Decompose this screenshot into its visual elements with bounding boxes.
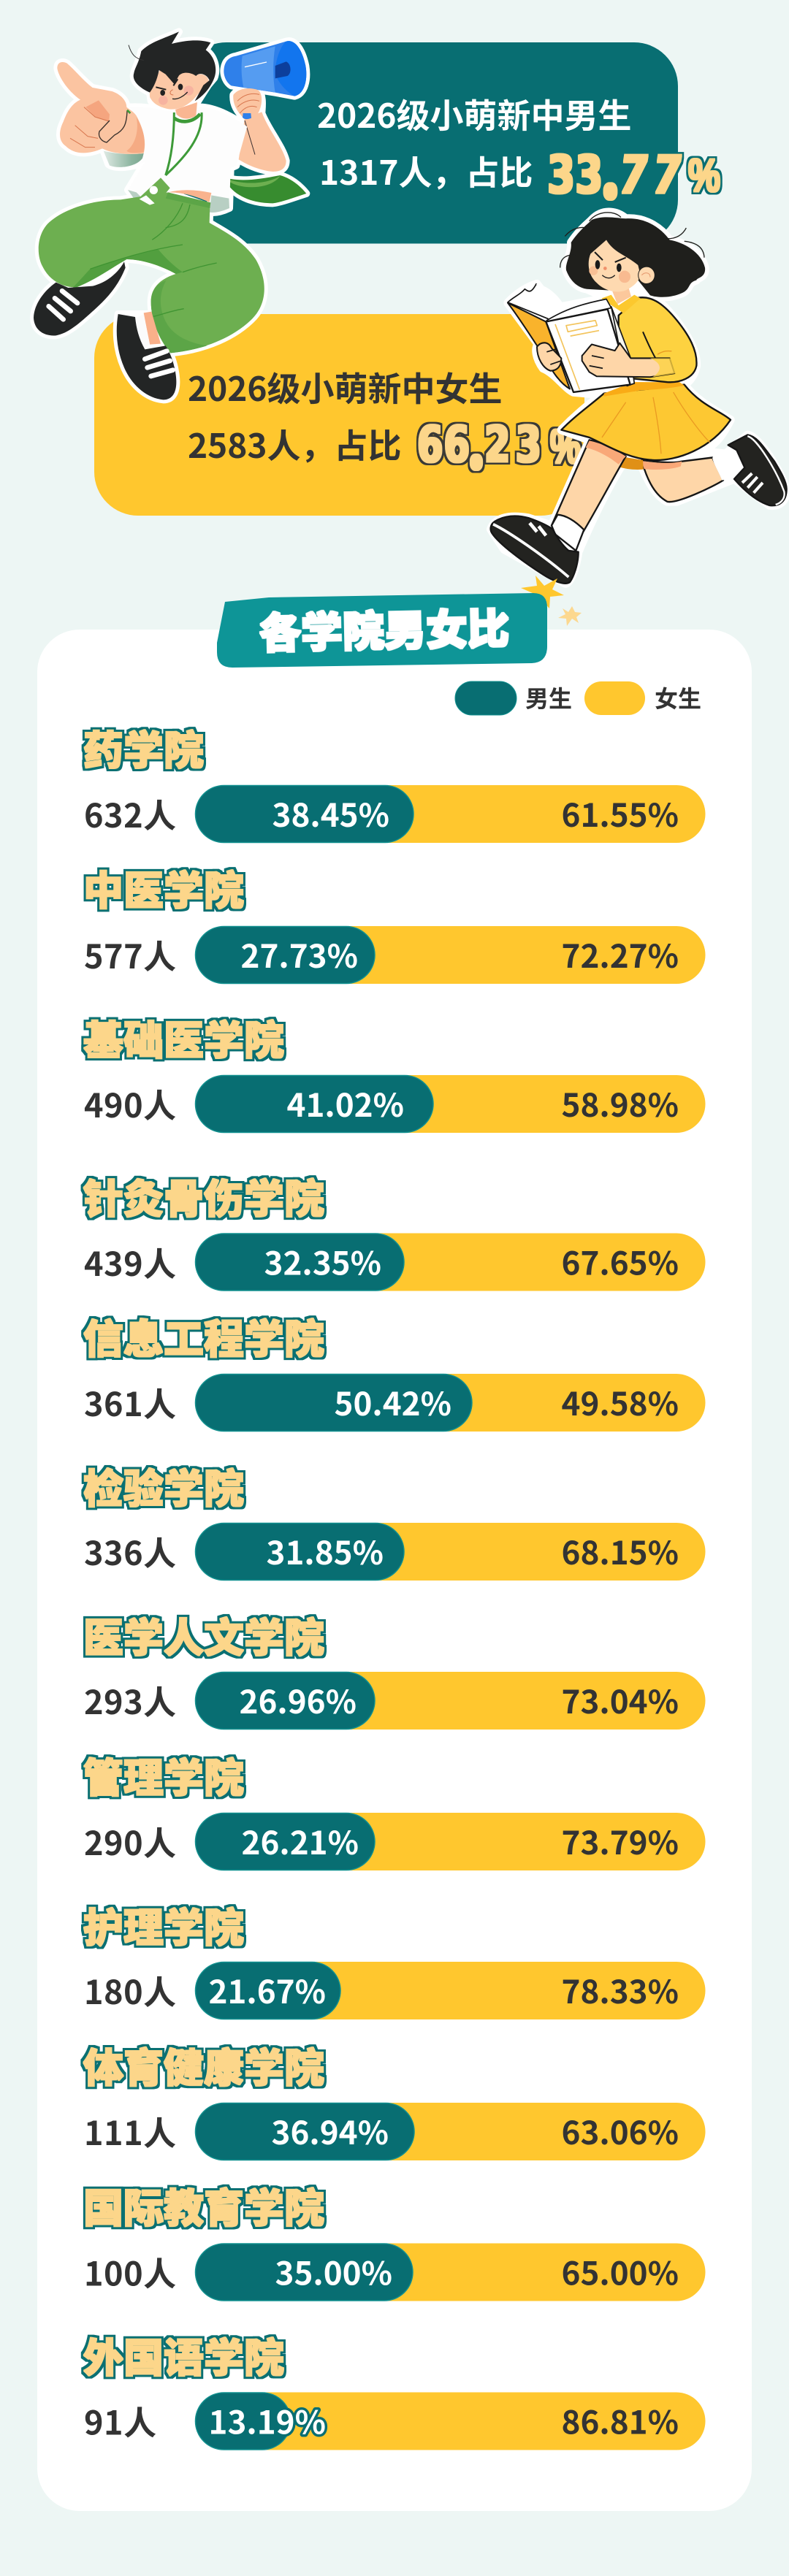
row: 中医学院	[83, 858, 706, 984]
boy: ribbon	[219, 175, 306, 203]
row: 基础医学院: 41.02%	[286, 1079, 404, 1126]
boy: shirt	[104, 107, 247, 213]
boys percentage 33.77%: 7	[620, 145, 648, 206]
heading banner: college gender ratio	[217, 593, 547, 668]
row: 针灸骨伤学院: 439人	[84, 1238, 177, 1285]
girl: face	[589, 240, 655, 304]
row: 管理学院: 26.21%	[241, 1817, 359, 1864]
row: 外国语学院: 86.81%	[561, 2397, 679, 2444]
legend: male and female keys: 男生	[525, 681, 572, 714]
row: 国际教育学院	[83, 2176, 706, 2301]
row: 外国语学院: 91人	[84, 2397, 157, 2444]
boy: right arm	[239, 112, 286, 172]
row: 基础医学院: 基础医学院	[83, 1008, 284, 1066]
row: 外国语学院: 外国语学院	[83, 2325, 284, 2384]
boys percentage 33.77%: 3	[547, 145, 575, 206]
row: 针灸骨伤学院: 32.35%	[264, 1237, 381, 1284]
row: 护理学院: 180人	[84, 1966, 177, 2014]
row: 医学人文学院: 26.96%	[239, 1676, 357, 1723]
girl: hands	[537, 343, 676, 377]
row: 护理学院: 护理学院	[83, 1895, 244, 1954]
boys percentage 33.77%: %	[688, 149, 720, 202]
row: 医学人文学院	[83, 1605, 706, 1730]
row: 信息工程学院: 49.58%	[561, 1378, 679, 1425]
row: 检验学院	[83, 1456, 706, 1581]
row: 医学人文学院: 293人	[84, 1676, 177, 1724]
row: 管理学院	[83, 1746, 706, 1870]
boy: neck and face	[150, 68, 209, 118]
row: 中医学院: 27.73%	[240, 930, 358, 977]
banner title: 各学院男女比	[259, 595, 510, 661]
row: 基础医学院	[83, 1008, 706, 1133]
girls percentage 66.23%: 2	[484, 416, 511, 474]
girl: skirt	[561, 382, 731, 460]
row: 信息工程学院: 361人	[84, 1378, 177, 1426]
row: 体育健康学院: 63.06%	[561, 2107, 679, 2154]
row: 信息工程学院: 50.42%	[334, 1378, 451, 1425]
row: 信息工程学院: 信息工程学院	[83, 1307, 324, 1365]
girls percentage 66.23%: 6	[443, 416, 470, 474]
row: 针灸骨伤学院: 针灸骨伤学院	[83, 1166, 324, 1225]
row: 药学院	[83, 718, 706, 843]
boy: lanyard and badge	[136, 112, 202, 211]
row: 体育健康学院: 36.94%	[271, 2107, 389, 2154]
row: 护理学院: 21.67%	[208, 1966, 326, 2013]
row: 检验学院: 31.85%	[266, 1527, 384, 1574]
row: 药学院: 61.55%	[561, 790, 679, 836]
boy: pointing hand	[57, 62, 145, 154]
girls percentage 66.23%: .	[466, 377, 487, 493]
girls percentage 66.23%: 6	[417, 416, 443, 474]
row: 中医学院: 中医学院	[83, 858, 244, 917]
girl: back leg and shoe	[641, 435, 787, 505]
girl: hair	[560, 213, 705, 297]
girls heading text: 2026级小萌新中女生	[188, 363, 503, 411]
row: 体育健康学院	[83, 2036, 706, 2160]
row: 医学人文学院: 73.04%	[561, 1676, 679, 1723]
row: 检验学院: 68.15%	[561, 1527, 679, 1574]
illustration: boy with megaphone	[34, 31, 306, 400]
boy: hand holding megaphone	[233, 88, 262, 119]
girl: front leg and shoe	[491, 440, 644, 584]
row: 外国语学院	[83, 2325, 706, 2450]
row: 药学院: 632人	[84, 790, 177, 837]
legend: male and female keys	[455, 681, 701, 715]
girls count text: 2583人，占比	[188, 420, 402, 468]
row: 基础医学院: 490人	[84, 1079, 177, 1127]
row: 药学院: 药学院	[83, 718, 204, 776]
girl: dress top and sleeve	[601, 295, 696, 382]
boy: megaphone	[224, 41, 306, 96]
boys percentage 33.77%	[547, 99, 720, 224]
boys percentage 33.77%: 7	[653, 145, 682, 206]
row: 管理学院: 73.79%	[561, 1817, 679, 1864]
row: 国际教育学院: 35.00%	[275, 2248, 392, 2295]
legend: male and female keys: 女生	[655, 681, 701, 714]
icon: small star	[558, 606, 582, 626]
panel: colleges card	[37, 630, 752, 2511]
row: 针灸骨伤学院: 67.65%	[561, 1237, 679, 1284]
illustration: girl reading a book	[491, 212, 787, 584]
row: 护理学院	[83, 1895, 706, 2019]
boy: trousers	[39, 192, 264, 353]
panel: girls summary	[94, 314, 584, 516]
row: 检验学院: 检验学院	[83, 1456, 244, 1515]
girls percentage 66.23%	[417, 377, 581, 493]
boys percentage 33.77%: .	[600, 99, 621, 224]
row: 医学人文学院: 医学人文学院	[83, 1605, 324, 1664]
icon: large star	[521, 576, 564, 608]
boy: right shoe and sock	[117, 312, 176, 400]
boy: hair	[129, 31, 216, 101]
row: 外国语学院: 13.19%	[208, 2397, 326, 2444]
row: 国际教育学院: 100人	[84, 2248, 177, 2295]
row: 护理学院: 78.33%	[561, 1966, 679, 2013]
row: 中医学院: 72.27%	[561, 930, 679, 977]
row: 药学院: 38.45%	[272, 790, 389, 836]
girls percentage 66.23%: 3	[515, 416, 541, 474]
row: 中医学院: 577人	[84, 930, 177, 978]
boys heading text: 2026级小萌新中男生	[317, 90, 632, 138]
row: 管理学院: 290人	[84, 1817, 177, 1865]
row: 管理学院: 管理学院	[83, 1746, 244, 1804]
boys count text: 1317人，占比	[319, 147, 533, 195]
row: 体育健康学院: 111人	[84, 2107, 177, 2155]
boys percentage 33.77%: 3	[575, 145, 603, 206]
girl: book	[508, 284, 634, 392]
row: 国际教育学院: 65.00%	[561, 2248, 679, 2295]
row: 国际教育学院: 国际教育学院	[83, 2176, 324, 2234]
panel: boys summary	[183, 42, 720, 244]
girls percentage 66.23%: %	[550, 419, 581, 473]
row: 信息工程学院	[83, 1307, 706, 1432]
row: 基础医学院: 58.98%	[561, 1079, 679, 1126]
row: 体育健康学院: 体育健康学院	[83, 2036, 324, 2094]
row: 针灸骨伤学院	[83, 1166, 706, 1291]
boy: left shoe	[34, 261, 126, 335]
row: 检验学院: 336人	[84, 1527, 177, 1575]
